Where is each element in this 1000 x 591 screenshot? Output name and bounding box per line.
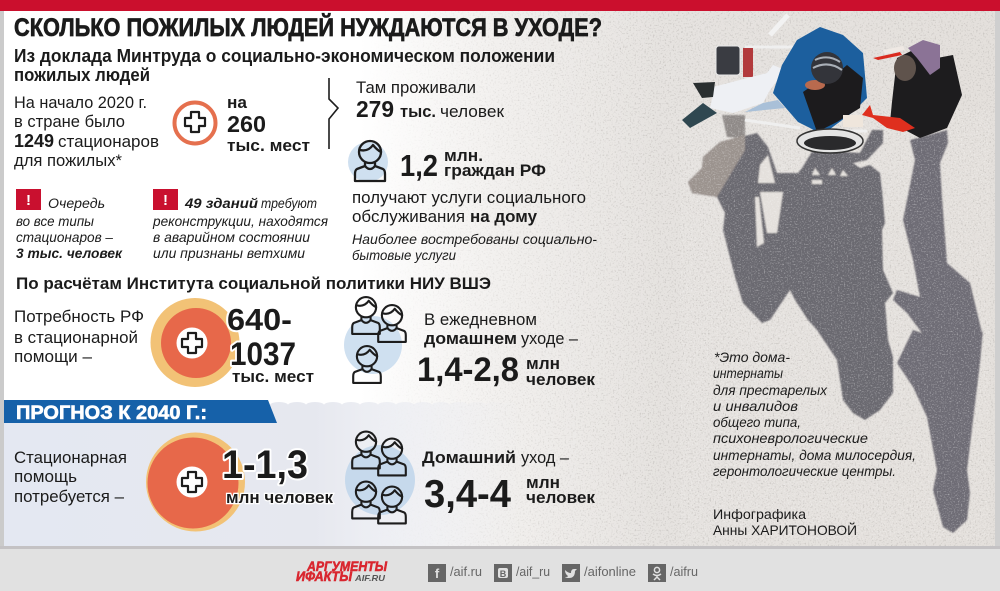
text: 1249 facilities (14, 93, 159, 170)
footnote: интернаты, дома милосердия, (713, 447, 916, 463)
footnote: геронтологические центры. (713, 463, 896, 479)
text: need for inpatient care: в стационарной (14, 328, 138, 347)
heading: Mintrud report: пожилых людей (14, 65, 150, 85)
stat: 640-1037 thousand places: 1037 (230, 336, 296, 372)
social: odnoklassniki (648, 564, 698, 582)
photo: person in wheelchair and helper from above (682, 15, 962, 153)
banner: forecast to 2040 (4, 400, 277, 424)
social: facebook (428, 564, 482, 582)
text: home social services: обслуживания (352, 207, 465, 226)
heading: HSE institute: По расчётам Института социальной политики НИУ ВШЭ (16, 274, 491, 293)
stat: 1.2 million citizens: млн. (444, 146, 483, 165)
icon: medical cross in ring (174, 102, 216, 144)
frame: red top bar (0, 0, 1000, 11)
text: home care: уход – (521, 448, 570, 467)
stat: 1-1.3 million people: млн человек (226, 488, 333, 507)
stat: 260 thousand places (227, 93, 310, 155)
text: inpatient care required: потребуется – (14, 487, 125, 506)
footer bar (0, 546, 1000, 591)
footnote: *Это дома- (714, 349, 790, 365)
text: 279 thousand residents: человек (440, 102, 505, 121)
credit: Анны ХАРИТОНОВОЙ (713, 521, 857, 538)
credit (713, 506, 857, 538)
footnote: и инвалидов (713, 398, 798, 414)
text: 279 thousand residents: тыс. (400, 102, 436, 121)
social: facebook: f (435, 566, 440, 581)
stat: 3.4-4 million people: млн (526, 473, 560, 492)
callout: 49 buildings: требуют (261, 195, 317, 211)
stat: 260 thousand places: на (227, 93, 248, 112)
text: 1249 facilities: стационаров (58, 132, 159, 151)
callout: queue: стационаров – (16, 229, 113, 245)
stat: 1.2 million citizens: граждан РФ (444, 161, 546, 180)
social: twitter (562, 564, 636, 582)
panel: forecast background (0, 402, 522, 546)
text: daily home care: В ежедневном (424, 310, 537, 329)
callout: queue (16, 189, 123, 261)
chart: need circles (150, 298, 240, 387)
text: need for inpatient care: Потребность РФ (14, 307, 144, 326)
photo: ground specks on shadow (680, 110, 990, 540)
bracket arrow (329, 78, 338, 149)
text: home care (422, 448, 570, 467)
footnote (713, 349, 916, 479)
stat: 1.4-2.8 million people: 1,4-2,8 (417, 351, 519, 389)
footnote: общего типа, (713, 414, 801, 430)
social: odnoklassniki: /aifru (670, 564, 698, 579)
text: need for inpatient care (14, 307, 144, 366)
stat: 260 thousand places: тыс. мест (227, 136, 310, 155)
callout: queue: 3 тыс. человек (16, 245, 123, 261)
text: need for inpatient care: помощи – (14, 347, 93, 366)
text: home social services: бытовые услуги (352, 247, 456, 263)
text: inpatient care required: помощь (14, 467, 77, 486)
social: vk: В (500, 569, 507, 579)
logo: ИФАКТЫ (296, 568, 353, 584)
banner: forecast to 2040: ПРОГНОЗ К 2040 Г.: (16, 403, 207, 424)
stat: 260 thousand places: 260 (227, 111, 266, 137)
callout: 49 buildings (152, 189, 328, 261)
logo (296, 558, 388, 584)
stat: 640-1037 thousand places: 640- (227, 302, 292, 337)
callout: 49 buildings: в аварийном состоянии (153, 229, 310, 245)
stat: 1.4-2.8 million people: млн (526, 354, 560, 373)
stat: 3.4-4 million people (424, 473, 595, 516)
footnote: для престарелых (713, 382, 828, 398)
icon: single person (348, 141, 388, 182)
text: home social services (352, 188, 597, 263)
callout: queue: ! (26, 192, 31, 209)
text: 279 thousand residents (356, 78, 505, 122)
callout: 49 buildings: 49 зданий (184, 195, 258, 211)
background (385, 11, 995, 546)
stat: 1.4-2.8 million people (417, 351, 595, 389)
text: home care: Домашний (422, 448, 516, 467)
icon: three people (344, 297, 406, 383)
heading: Mintrud report: Из доклада Минтруда о социально-экономическом положении (14, 46, 555, 66)
icon: four people (345, 432, 415, 523)
title: СКОЛЬКО ПОЖИЛЫХ ЛЮДЕЙ НУЖДАЮТСЯ В УХОДЕ? (14, 12, 602, 42)
social: vk (494, 564, 550, 582)
stat: 3.4-4 million people: 3,4-4 (424, 473, 511, 516)
callout: 49 buildings: реконструкции, находятся (152, 213, 328, 229)
stat: 1-1.3 million people: 1-1,3 (222, 443, 308, 487)
text: 1249 facilities: в стране было (14, 112, 125, 131)
chart: forecast circles (146, 432, 245, 532)
text: home social services: получают услуги социального (352, 188, 586, 207)
text: daily home care (424, 310, 579, 348)
stat: 640-1037 thousand places: тыс. мест (232, 367, 314, 386)
text: daily home care: уходе – (521, 329, 579, 348)
stat: 1.4-2.8 million people: человек (526, 370, 595, 389)
text: 1249 facilities: для пожилых* (14, 151, 122, 170)
heading: Mintrud report (14, 46, 555, 85)
stat: 1-1.3 million people (222, 443, 333, 507)
logo: АРГУМЕНТЫ (306, 558, 388, 574)
text: inpatient care required (14, 448, 127, 506)
social: facebook: /aif.ru (450, 564, 482, 579)
social: twitter: /aifonline (584, 564, 636, 579)
frame: left strip (0, 11, 4, 547)
text: home social services: на дому (470, 207, 538, 226)
credit: Инфографика (713, 506, 806, 522)
logo: AIF.RU (354, 573, 386, 583)
callout: 49 buildings: ! (163, 192, 168, 209)
stat: 640-1037 thousand places (227, 302, 314, 386)
text: 279 thousand residents: Там проживали (356, 78, 476, 97)
text: home social services: Наиболее востребованы социально- (352, 231, 597, 247)
text: inpatient care required: Стационарная (14, 448, 127, 467)
text: daily home care: домашнем (424, 329, 517, 348)
callout: queue: Очередь (48, 195, 105, 211)
stat: 1.2 million citizens: 1,2 (400, 148, 438, 183)
callout: 49 buildings: или признаны ветхими (153, 245, 305, 261)
stat: 3.4-4 million people: человек (526, 488, 595, 507)
text: 279 thousand residents: 279 (356, 96, 394, 122)
footnote: интернаты (713, 365, 784, 381)
text: 1249 facilities: 1249 (14, 131, 54, 151)
footnote: психоневрологические (713, 430, 868, 446)
stat: 1.2 million citizens (400, 146, 546, 183)
photo: shadows of wheelchair and helper (688, 115, 983, 533)
text: 1249 facilities: На начало 2020 г. (14, 93, 147, 112)
frame: right strip (995, 11, 1000, 547)
social: vk: /aif_ru (516, 564, 550, 579)
callout: queue: во все типы (16, 213, 95, 229)
